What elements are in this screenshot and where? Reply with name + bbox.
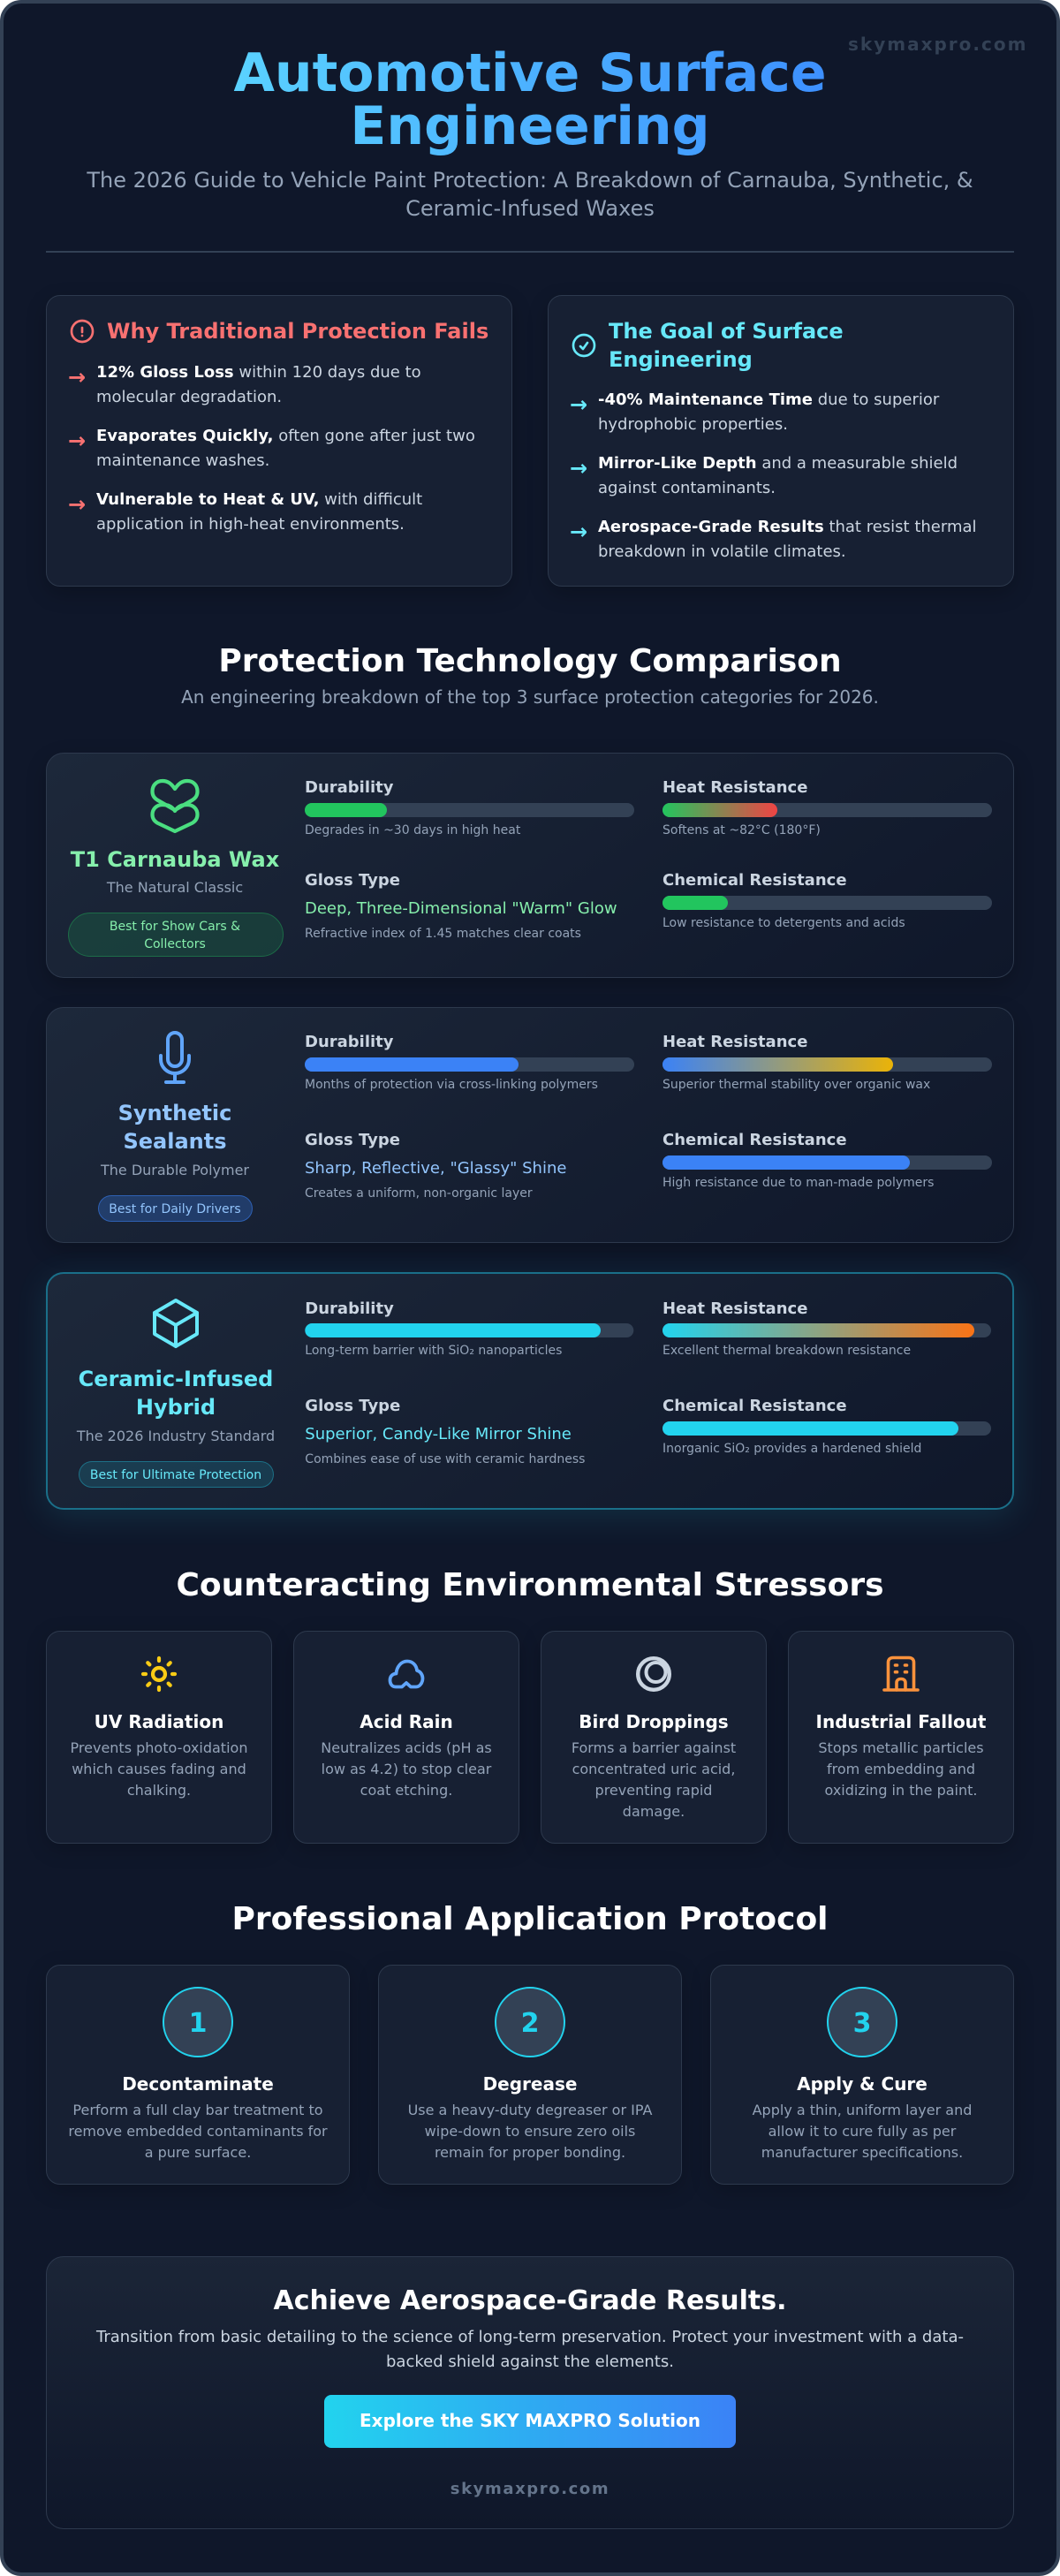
metric: heat resistance bbox=[662, 778, 992, 837]
metric: heat resistance bbox=[662, 1033, 992, 1092]
metric: chemical resistance bbox=[662, 1397, 991, 1456]
badge: best for ultimate protection bbox=[80, 1461, 274, 1488]
name: synthetic sealants: Sealants bbox=[123, 1129, 227, 1154]
card description bbox=[818, 1739, 984, 1799]
card description: wipe-down to ensure zero oils bbox=[425, 2123, 635, 2140]
list item: maintenance time bbox=[570, 390, 940, 434]
card description: a pure surface. bbox=[145, 2144, 251, 2161]
card description: concentrated uric acid, bbox=[572, 1761, 735, 1777]
subheading: comparison: An engineering breakdown of the top 3 surface protection categories for 2026. bbox=[181, 686, 879, 708]
icon: cloud bbox=[390, 1661, 422, 1687]
metric: durability: Durability bbox=[305, 778, 394, 797]
metric: chemical resistance bbox=[662, 1131, 992, 1190]
metric: chemical resistance: Inorganic SiO₂ provides a hardened shield bbox=[662, 1442, 921, 1456]
badge: best for ultimate protection: Best for Ultimate Protection bbox=[90, 1468, 261, 1482]
metric: chemical resistance: Low resistance to detergents and acids bbox=[662, 916, 905, 930]
panel: step 3 bbox=[710, 1965, 1014, 2190]
list item: evaporates quickly: maintenance washes. bbox=[96, 451, 269, 470]
tagline: The Natural Classic bbox=[106, 879, 243, 896]
title bbox=[233, 42, 827, 157]
metric: chemical resistance: High resistance due to man-made polymers bbox=[662, 1176, 934, 1190]
card description: low as 4.2) to stop clear bbox=[322, 1761, 492, 1777]
metric: durability: Durability bbox=[305, 1033, 394, 1051]
list item: evaporates quickly: Evaporates Quickly, often gone after just two bbox=[96, 427, 475, 445]
list item: mirror-like depth: Mirror-Like Depth and a measurable shield bbox=[598, 454, 958, 473]
list item: evaporates quickly: → bbox=[68, 428, 86, 453]
name: ceramic-infused hybrid: Hybrid bbox=[136, 1395, 216, 1420]
card title: UV Radiation bbox=[95, 1711, 223, 1732]
panel: step 2 bbox=[378, 1965, 682, 2190]
heading: goal of surface engineering bbox=[609, 319, 844, 372]
badge: best for show cars bbox=[69, 913, 283, 956]
card description bbox=[68, 2102, 328, 2161]
list item: maintenance time: -40% Maintenance Time due to superior bbox=[598, 390, 940, 409]
card description: Perform a full clay bar treatment to bbox=[72, 2102, 323, 2118]
metric: heat resistance: Softens at ~82°C (180°F) bbox=[662, 823, 821, 837]
metric: gloss type bbox=[305, 1131, 566, 1201]
step number: 3 bbox=[853, 2008, 871, 2039]
subtitle: Ceramic-Infused Waxes bbox=[405, 196, 655, 221]
list item: gloss loss: 12% Gloss Loss within 120 days due to bbox=[96, 363, 421, 382]
icon: cube bbox=[155, 1300, 197, 1346]
step number bbox=[828, 1988, 897, 2057]
card title: Apply & Cure bbox=[797, 2073, 928, 2095]
panel: industrial fallout bbox=[788, 1631, 1014, 1849]
metric: heat resistance bbox=[662, 1299, 991, 1358]
panel: bird droppings bbox=[541, 1631, 767, 1849]
metric: chemical resistance: Chemical Resistance bbox=[662, 1131, 847, 1149]
metric: gloss type: Deep, Three-Dimensional "Warm" Glow bbox=[305, 899, 617, 918]
card description bbox=[71, 1739, 247, 1799]
list item: maintenance time: → bbox=[570, 392, 587, 417]
heading: application protocol: Professional Application Protocol bbox=[231, 1901, 829, 1937]
panel: goal of surface engineering bbox=[548, 295, 1014, 594]
metric: durability bbox=[305, 778, 634, 837]
list item: maintenance time: hydrophobic properties. bbox=[598, 415, 788, 434]
card title: Industrial Fallout bbox=[816, 1711, 987, 1732]
card description: preventing rapid bbox=[595, 1782, 712, 1799]
card description: Prevents photo-oxidation bbox=[71, 1739, 247, 1756]
button: explore solution bbox=[324, 2395, 736, 2448]
step number bbox=[163, 1988, 232, 2057]
list item: mirror-like depth: against contaminants. bbox=[598, 479, 776, 497]
card description: remove embedded contaminants for bbox=[68, 2123, 328, 2140]
card title: Acid Rain bbox=[360, 1711, 453, 1732]
panel: synthetic sealants bbox=[46, 1007, 1014, 1250]
metric: gloss type: Sharp, Reflective, "Glassy" Shine bbox=[305, 1159, 566, 1178]
step number: 2 bbox=[521, 2008, 539, 2039]
card description: oxidizing in the paint. bbox=[825, 1782, 977, 1799]
metric: durability: Months of protection via cross-linking polymers bbox=[305, 1078, 598, 1092]
metric: heat resistance: Superior thermal stability over organic wax bbox=[662, 1078, 930, 1092]
heading: why traditional protection fails: Why Traditional Protection Fails bbox=[107, 319, 488, 344]
icon: building bbox=[884, 1657, 918, 1690]
list item: gloss loss: molecular degradation. bbox=[96, 388, 282, 406]
subtitle bbox=[86, 168, 973, 221]
panel: uv radiation bbox=[46, 1631, 272, 1849]
cta text: backed shield against the elements. bbox=[386, 2352, 674, 2371]
panel: t1 carnauba wax bbox=[46, 753, 1014, 985]
icon: concentric rings bbox=[638, 1658, 670, 1690]
step number bbox=[496, 1988, 564, 2057]
metric: gloss type: Combines ease of use with ceramic hardness bbox=[305, 1452, 585, 1466]
list item: gloss loss: → bbox=[68, 365, 86, 390]
metric: durability bbox=[305, 1299, 633, 1358]
cta text bbox=[95, 2328, 964, 2371]
card description bbox=[753, 2102, 972, 2161]
card description: coat etching. bbox=[360, 1782, 452, 1799]
panel: acid rain bbox=[293, 1631, 519, 1849]
name: synthetic sealants bbox=[118, 1101, 231, 1154]
metric: gloss type: Gloss Type bbox=[305, 871, 400, 890]
icon: check circle bbox=[573, 335, 594, 356]
button: explore solution: Explore the SKY MAXPRO Solution bbox=[360, 2410, 700, 2431]
icon: microphone bbox=[161, 1033, 189, 1082]
list item: evaporates quickly bbox=[68, 427, 475, 470]
metric: gloss type bbox=[305, 1397, 585, 1466]
card description: which causes fading and bbox=[72, 1761, 246, 1777]
panel: ceramic-infused hybrid bbox=[46, 1273, 1014, 1517]
metric: heat resistance: Excellent thermal breakdown resistance bbox=[662, 1344, 911, 1358]
subtitle: The 2026 Guide to Vehicle Paint Protection: A Breakdown of Carnauba, Synthetic, & bbox=[86, 168, 973, 193]
badge: best for show cars: Collectors bbox=[144, 937, 206, 951]
badge: best for daily drivers bbox=[99, 1196, 253, 1221]
cta heading: Achieve Aerospace-Grade Results. bbox=[274, 2285, 786, 2316]
badge: best for show cars: Best for Show Cars & bbox=[110, 920, 240, 934]
card description: from embedding and bbox=[827, 1761, 975, 1777]
card title: Degrease bbox=[483, 2073, 577, 2095]
metric: gloss type: Refractive index of 1.45 matches clear coats bbox=[305, 927, 581, 941]
metric: durability: Durability bbox=[305, 1299, 394, 1318]
card title: Bird Droppings bbox=[579, 1711, 729, 1732]
list item: aerospace-grade results: breakdown in volatile climates. bbox=[598, 542, 846, 561]
list item: heat and uv: application in high-heat environments. bbox=[96, 515, 405, 534]
list item: mirror-like depth bbox=[570, 454, 958, 497]
metric: chemical resistance bbox=[662, 871, 992, 930]
card description: manufacturer specifications. bbox=[761, 2144, 963, 2161]
card description bbox=[321, 1739, 492, 1799]
card description: Forms a barrier against bbox=[572, 1739, 736, 1756]
metric: gloss type bbox=[305, 871, 617, 941]
metric: heat resistance: Heat Resistance bbox=[662, 1299, 807, 1318]
card title: Decontaminate bbox=[122, 2073, 274, 2095]
panel: call to action bbox=[46, 2256, 1014, 2528]
list item: heat and uv bbox=[68, 490, 422, 534]
card description: Use a heavy-duty degreaser or IPA bbox=[408, 2102, 652, 2118]
metric: gloss type: Gloss Type bbox=[305, 1131, 400, 1149]
panel: why traditional protection fails bbox=[46, 295, 512, 594]
metric: chemical resistance: Chemical Resistance bbox=[662, 1397, 847, 1415]
list item: aerospace-grade results: Aerospace-Grade Results that resist thermal bbox=[598, 518, 977, 536]
card description: Stops metallic particles bbox=[818, 1739, 984, 1756]
name: t1 carnauba wax: T1 Carnauba Wax bbox=[71, 847, 280, 872]
icon: stacked hearts bbox=[152, 781, 198, 831]
metric: durability bbox=[305, 1033, 634, 1092]
card description: remain for proper bonding. bbox=[435, 2144, 625, 2161]
footer url: skymaxpro.com bbox=[450, 2480, 610, 2498]
metric: durability: Long-term barrier with SiO₂ nanoparticles bbox=[305, 1344, 562, 1358]
name: ceramic-infused hybrid bbox=[79, 1367, 273, 1420]
list item: heat and uv: Vulnerable to Heat & UV, with difficult bbox=[96, 490, 422, 509]
title: Engineering bbox=[350, 95, 710, 157]
badge: best for daily drivers: Best for Daily Drivers bbox=[109, 1202, 241, 1216]
metric: chemical resistance: Chemical Resistance bbox=[662, 871, 847, 890]
metric: heat resistance: Heat Resistance bbox=[662, 778, 807, 797]
cta text: Transition from basic detailing to the science of long-term preservation. Protect your investment with a data- bbox=[95, 2328, 964, 2346]
list item: heat and uv: → bbox=[68, 492, 86, 517]
card description bbox=[572, 1739, 736, 1820]
metric: heat resistance: Heat Resistance bbox=[662, 1033, 807, 1051]
metric: gloss type: Superior, Candy-Like Mirror Shine bbox=[305, 1425, 572, 1443]
card description: allow it to cure fully as per bbox=[768, 2123, 957, 2140]
icon: alert circle bbox=[72, 321, 93, 342]
card description: chalking. bbox=[127, 1782, 191, 1799]
card description: damage. bbox=[623, 1803, 685, 1820]
list item: mirror-like depth: → bbox=[570, 456, 587, 481]
icon: sun bbox=[143, 1658, 175, 1690]
metric: durability: Degrades in ~30 days in high heat bbox=[305, 823, 521, 837]
list item: aerospace-grade results: → bbox=[570, 519, 587, 544]
metric: gloss type: Creates a uniform, non-organic layer bbox=[305, 1186, 533, 1201]
tagline: The Durable Polymer bbox=[100, 1162, 249, 1178]
name: synthetic sealants: Synthetic bbox=[118, 1101, 231, 1125]
panel: step 1 bbox=[46, 1965, 350, 2190]
step number: 1 bbox=[189, 2008, 207, 2039]
heading: goal of surface engineering: Engineering bbox=[609, 347, 753, 372]
heading: protection technology comparison: Protection Technology Comparison bbox=[218, 643, 842, 679]
name: ceramic-infused hybrid: Ceramic-Infused bbox=[79, 1367, 273, 1391]
list item: gloss loss bbox=[68, 363, 421, 406]
heading: goal of surface engineering: The Goal of Surface bbox=[609, 319, 844, 344]
card description bbox=[408, 2102, 652, 2161]
tagline: The 2026 Industry Standard bbox=[76, 1428, 275, 1444]
heading: environmental stressors: Counteracting Environmental Stressors bbox=[176, 1567, 884, 1603]
card description: Neutralizes acids (pH as bbox=[321, 1739, 492, 1756]
title: Automotive Surface bbox=[233, 42, 827, 104]
card description: Apply a thin, uniform layer and bbox=[753, 2102, 972, 2118]
metric: gloss type: Gloss Type bbox=[305, 1397, 400, 1415]
watermark: skymaxpro.com bbox=[848, 34, 1027, 55]
list item: aerospace-grade results bbox=[570, 518, 977, 561]
